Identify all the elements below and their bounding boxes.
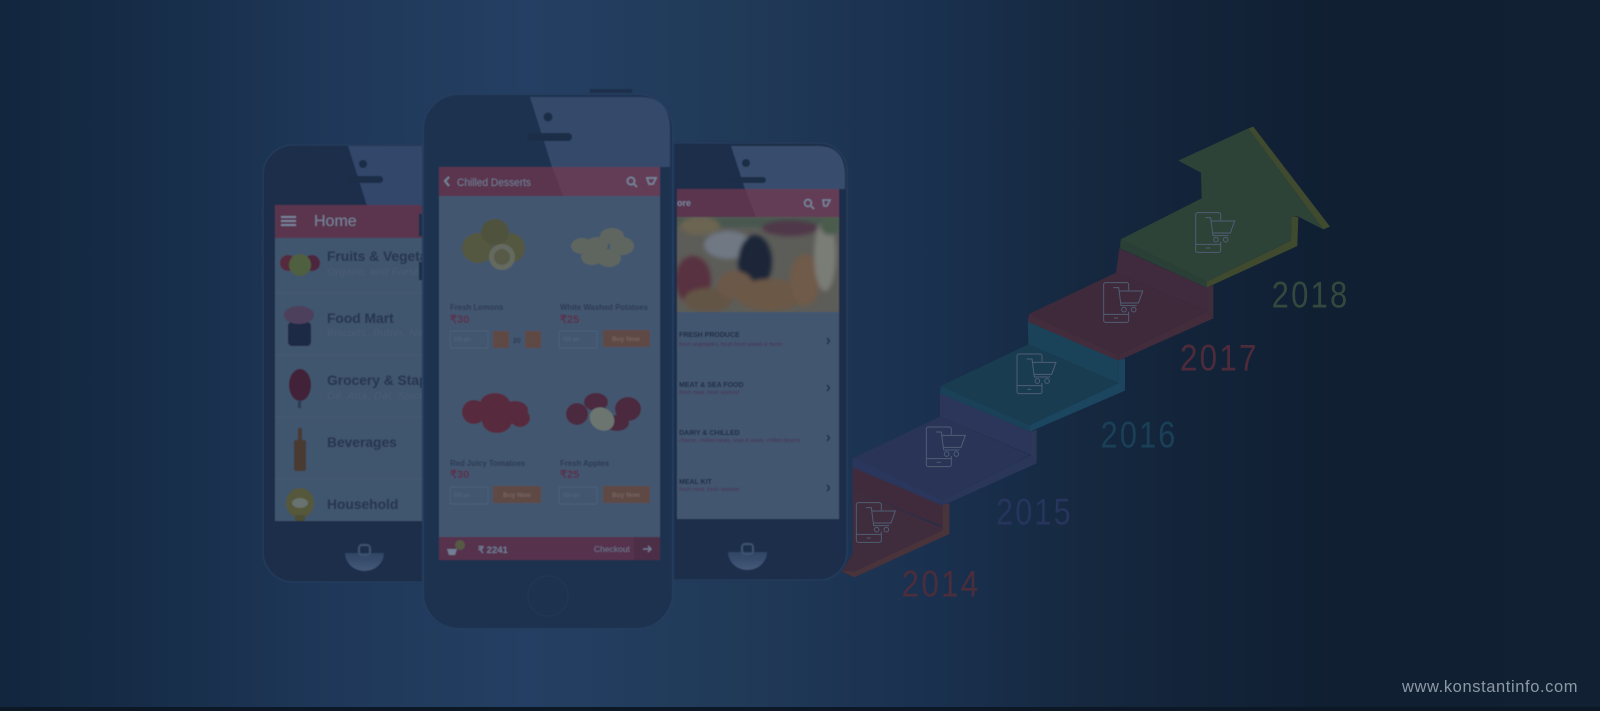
right phone <box>674 144 848 580</box>
buy now buttons: Buy Now <box>612 336 641 343</box>
year labels: 2016 <box>1101 415 1177 456</box>
store department titles: FRESH PRODUCE <box>679 332 740 339</box>
bottom edge band <box>0 707 1600 711</box>
header text: ore <box>677 198 691 208</box>
product names: White Washed Potatoes <box>560 303 649 312</box>
weight labels: 500 gm <box>454 493 471 499</box>
category labels: Grocery & Staples <box>327 373 447 388</box>
step 2017 <box>1028 248 1213 361</box>
product prices: ₹30 <box>450 314 469 326</box>
product: lemons <box>462 219 525 270</box>
center phone product screen <box>439 167 660 560</box>
header title: Chilled Desserts <box>457 177 531 189</box>
store department titles: DAIRY & CHILLED <box>679 430 740 437</box>
header icons <box>627 177 656 187</box>
weight labels <box>454 337 580 499</box>
left phone screen glare <box>348 146 430 206</box>
buy now buttons: Buy Now <box>612 492 641 499</box>
menu icon <box>281 216 296 226</box>
left phone side buttons <box>259 205 262 284</box>
center phone camera and speaker <box>527 112 572 141</box>
center phone side and top buttons <box>419 89 632 280</box>
center phone glare <box>530 97 670 167</box>
icon: phone and cart 2014 <box>856 503 895 542</box>
category descriptions: Biscuits, Butter, Namkeen <box>327 327 457 339</box>
store department descriptions: fresh vegetables, fresh fresh salads & herbs <box>679 342 783 348</box>
left phone home screen <box>274 204 422 522</box>
product names: Fresh Apples <box>560 459 610 468</box>
weight labels: 500 gm <box>563 493 580 499</box>
website address: www.konstantinfo.com <box>1401 678 1578 696</box>
step 2015 <box>853 393 1037 506</box>
header icons <box>805 200 830 209</box>
right phone home button <box>728 544 767 570</box>
store department descriptions: fresh meat, fresh seafood <box>679 390 740 396</box>
product prices <box>450 314 579 481</box>
category descriptions: Oil, Atta, Dal, Spices... <box>327 390 442 402</box>
store photo <box>675 215 840 312</box>
growth staircase <box>842 127 1349 605</box>
product: tomatoes <box>462 393 530 433</box>
right phone glare <box>731 146 845 189</box>
product names: Red Juicy Tomatoes <box>450 459 526 468</box>
icon: phone and cart 2018 <box>1196 213 1235 252</box>
buy now buttons: Buy Now <box>503 492 532 499</box>
store department titles: MEAL KIT <box>679 479 713 486</box>
category icons <box>280 254 320 523</box>
weight labels: 500 gm <box>454 337 471 343</box>
checkout bar <box>439 537 660 560</box>
year labels: 2015 <box>996 492 1073 533</box>
category labels: Food Mart <box>327 311 394 326</box>
category labels <box>327 249 455 512</box>
category dividers <box>275 293 425 479</box>
header title: Home <box>314 213 357 230</box>
category descriptions: Organic and Fresh Fruits <box>327 266 453 278</box>
back arrow <box>445 177 449 186</box>
icon: phone and cart 2017 <box>1104 283 1143 322</box>
product names: Fresh Lemons <box>450 303 504 312</box>
category labels: Household <box>327 497 398 512</box>
checkout bar: Checkout <box>594 544 631 554</box>
icon: phone and cart 2015 <box>926 427 965 467</box>
product prices: ₹25 <box>560 314 579 326</box>
buy now buttons <box>493 330 650 503</box>
icon: phone and cart 2016 <box>1017 354 1056 394</box>
left phone <box>262 146 422 582</box>
quantity buttons: 20 <box>513 338 521 345</box>
year labels: 2018 <box>1272 275 1349 316</box>
left phone home button <box>345 545 384 571</box>
right phone store screen <box>675 189 840 519</box>
step 2016 <box>940 322 1125 432</box>
store department titles <box>679 332 744 486</box>
product prices: ₹25 <box>560 469 579 481</box>
quantity buttons <box>493 331 541 348</box>
year labels: 2014 <box>902 564 980 605</box>
center phone home button <box>528 576 568 616</box>
category descriptions <box>327 266 457 402</box>
year labels <box>902 275 1349 605</box>
year labels: 2017 <box>1180 338 1259 379</box>
step 2014 <box>842 467 949 577</box>
product: apples <box>566 393 641 435</box>
store department descriptions <box>679 342 801 493</box>
checkout bar: ₹ 2241 <box>478 545 509 556</box>
left phone camera and speaker <box>345 160 383 183</box>
store department titles: MEAT & SEA FOOD <box>679 382 744 389</box>
store department descriptions: fresh meat, fresh seafood <box>679 487 740 493</box>
right phone camera and speaker <box>728 159 766 183</box>
store department descriptions: cheese, chilled meals, soup & pasta, chilled deserts <box>679 438 801 444</box>
weight selectors <box>450 331 597 504</box>
product prices: ₹30 <box>450 469 469 481</box>
weight labels: 500 gm <box>563 337 580 343</box>
product: potatoes <box>571 228 634 267</box>
step 2018 arrow <box>1120 127 1330 288</box>
product names <box>450 303 649 468</box>
category labels: Fruits & Vegetables <box>327 249 455 264</box>
store department arrows <box>827 338 830 491</box>
center phone <box>419 89 673 629</box>
category labels: Beverages <box>327 435 397 450</box>
